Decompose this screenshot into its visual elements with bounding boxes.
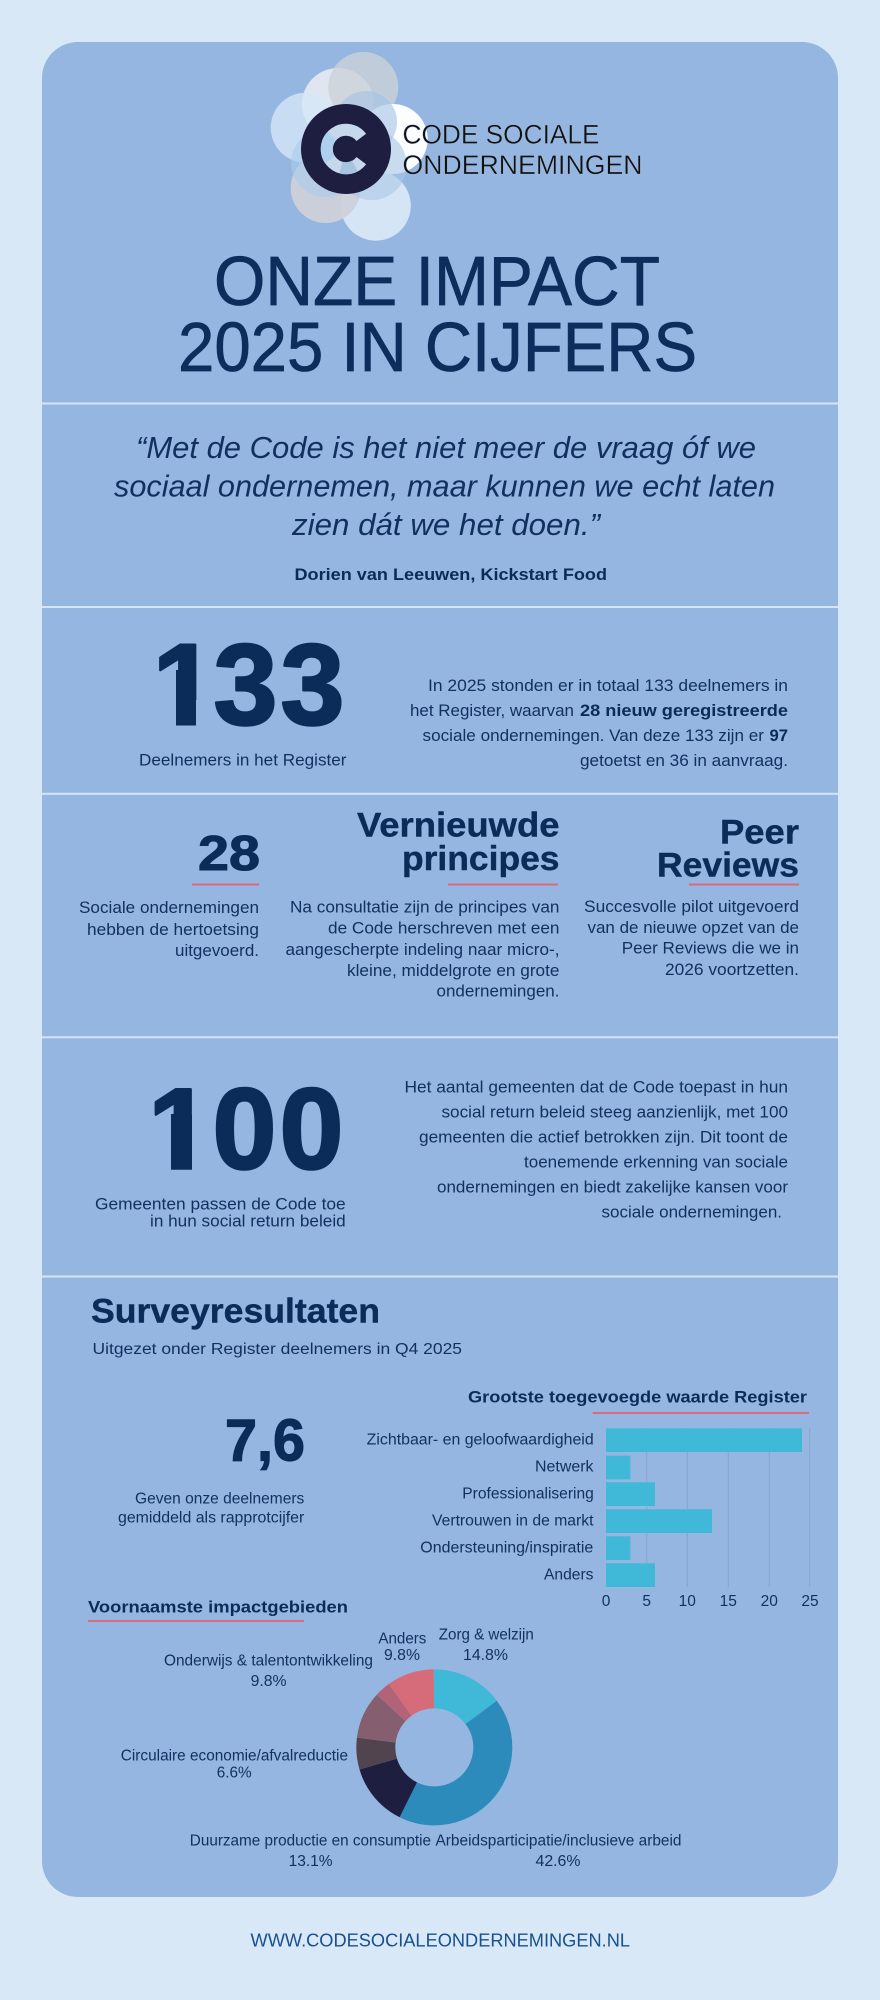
quote: zien dát we het doen.”: [291, 507, 602, 542]
heading: Voornaamste impactgebieden: Voornaamste impactgebieden: [88, 1599, 348, 1617]
bar chart: grootste toegevoegde waarde: [367, 1389, 819, 1610]
text: gemeenten description: [404, 1079, 789, 1222]
heading: Surveyresultaten: [91, 1293, 462, 1358]
stat: 133 deelnemers: 1: [152, 621, 216, 749]
column: 28 hertoetsing: uitgevoerd.: [175, 942, 259, 960]
donut chart: impactgebieden: [376, 1689, 493, 1806]
axis labels: 20: [761, 1593, 778, 1610]
donut labels: 13.1%: [289, 1853, 333, 1870]
chart title: Grootste toegevoegde waarde Register: [468, 1389, 808, 1407]
column: 28 hertoetsing: [79, 827, 260, 960]
axis labels: [602, 1593, 819, 1610]
text: gemeenten description: toenemende erkenning van sociale: [524, 1154, 788, 1172]
category labels: Vertrouwen in de markt: [432, 1512, 594, 1529]
donut labels: Anders: [378, 1630, 427, 1647]
donut labels: [121, 1626, 682, 1870]
stat: 133 deelnemers: [139, 621, 347, 770]
column: Vernieuwde principes: Vernieuwde: [357, 807, 560, 845]
category labels: Netwerk: [535, 1458, 594, 1475]
quote: [114, 430, 775, 584]
logo: Code Sociale Ondernemingen: ONDERNEMINGEN: [402, 150, 642, 180]
footer URL: WWW.CODESOCIALEONDERNEMINGEN.NL: [250, 1931, 630, 1951]
donut labels: Circulaire economie/afvalreductie: [121, 1747, 348, 1764]
column: Peer Reviews: Succesvolle pilot uitgevoerd: [584, 898, 799, 916]
donut labels: Arbeidsparticipatie/inclusieve arbeid: [436, 1832, 682, 1849]
category labels: Zichtbaar- en geloofwaardigheid: [367, 1431, 594, 1448]
stat: 133 deelnemers: Deelnemers in het Register: [139, 752, 347, 770]
stat: 100 gemeenten: in hun social return beleid: [150, 1213, 346, 1231]
donut labels: Duurzame productie en consumptie: [190, 1832, 431, 1849]
text: Register description: 28 nieuw geregistreerde: [580, 702, 788, 720]
donut labels: 9.8%: [251, 1673, 287, 1690]
stat: rapportcijfer 7,6: [118, 1407, 305, 1527]
column: Peer Reviews: Reviews: [657, 847, 799, 885]
axis labels: 5: [642, 1593, 651, 1610]
title: [178, 242, 697, 386]
stat: rapportcijfer 7,6: Geven onze deelnemers: [135, 1490, 305, 1507]
text: gemeenten description: social return beleid steeg aanzienlijk, met 100: [442, 1104, 788, 1122]
stat: 100 gemeenten: Gemeenten passen de Code toe: [95, 1195, 346, 1213]
bars: [606, 1428, 802, 1587]
quote: “Met de Code is het niet meer de vraag óf we: [136, 430, 756, 465]
text: Register description: [410, 677, 788, 770]
column: Peer Reviews: Peer: [720, 813, 799, 851]
logo: Code Sociale Ondernemingen: CODE SOCIALE: [402, 120, 600, 150]
logo: Code Sociale Ondernemingen: [271, 52, 642, 241]
category labels: Professionalisering: [462, 1485, 594, 1502]
donut labels: Zorg & welzijn: [439, 1626, 534, 1643]
title: ONZE IMPACT: [214, 242, 660, 320]
text: Register description: sociale ondernemingen. Van deze 133 zijn er: [422, 727, 765, 745]
text: gemeenten description: sociale ondernemingen.: [602, 1204, 782, 1222]
donut labels: Onderwijs & talentontwikkeling: [164, 1653, 373, 1670]
axis labels: 10: [679, 1593, 696, 1610]
column: Peer Reviews: Peer Reviews die we in: [622, 940, 799, 958]
stat: 133 deelnemers: 33: [214, 621, 344, 749]
title: 2025 IN CIJFERS: [178, 308, 697, 386]
category labels: [367, 1431, 594, 1583]
stat: 100 gemeenten: 1: [148, 1065, 212, 1193]
column: Vernieuwde principes: de Code herschreven met een: [328, 920, 560, 938]
column: Vernieuwde principes: ondernemingen.: [436, 983, 560, 1001]
column: Peer Reviews: [584, 813, 799, 979]
column: Peer Reviews: van de nieuwe opzet van de: [588, 919, 799, 937]
stat: 100 gemeenten: 00: [212, 1065, 343, 1193]
heading: Surveyresultaten: Uitgezet onder Register deelnemers in Q4 2025: [92, 1341, 462, 1358]
text: Register description: getoetst en 36 in aanvraag.: [580, 752, 788, 770]
column: 28 hertoetsing: 28: [198, 827, 260, 881]
column: Vernieuwde principes: [286, 807, 560, 1001]
category labels: Ondersteuning/inspiratie: [420, 1539, 593, 1556]
text: Register description: het Register, waarvan: [410, 702, 574, 720]
text: Register description: 97: [770, 727, 788, 745]
text: gemeenten description: ondernemingen en biedt zakelijke kansen voor: [437, 1179, 789, 1197]
column: 28 hertoetsing: hebben de hertoetsing: [87, 921, 259, 939]
donut labels: 9.8%: [384, 1647, 420, 1664]
column: Peer Reviews: 2026 voortzetten.: [665, 961, 799, 979]
stat: rapportcijfer 7,6: gemiddeld als rapprotcijfer: [118, 1510, 304, 1527]
heading: Surveyresultaten: Surveyresultaten: [91, 1293, 380, 1331]
category labels: Anders: [544, 1566, 594, 1583]
axis labels: 0: [602, 1593, 611, 1610]
column: Vernieuwde principes: kleine, middelgrote en grote: [347, 962, 560, 980]
stat: rapportcijfer 7,6: 7,6: [225, 1407, 305, 1473]
axis labels: 15: [720, 1593, 737, 1610]
column: 28 hertoetsing: Sociale ondernemingen: [79, 899, 259, 917]
stat: 100 gemeenten: [95, 1065, 346, 1231]
quote: Dorien van Leeuwen, Kickstart Food: [294, 565, 607, 584]
quote: sociaal ondernemen, maar kunnen we echt laten: [114, 469, 775, 504]
column: Vernieuwde principes: aangescherpte indeling naar micro-,: [286, 941, 560, 959]
column: Vernieuwde principes: principes: [402, 840, 560, 878]
column: Vernieuwde principes: Na consultatie zijn de principes van: [290, 899, 560, 917]
text: Register description: In 2025 stonden er in totaal 133 deelnemers in: [428, 677, 788, 695]
axis labels: 25: [801, 1593, 819, 1610]
text: gemeenten description: Het aantal gemeenten dat de Code toepast in hun: [404, 1079, 788, 1097]
text: gemeenten description: gemeenten die actief betrokken zijn. Dit toont de: [419, 1129, 788, 1147]
donut labels: 42.6%: [536, 1853, 581, 1870]
donut labels: 14.8%: [463, 1647, 508, 1664]
donut labels: 6.6%: [217, 1764, 252, 1781]
